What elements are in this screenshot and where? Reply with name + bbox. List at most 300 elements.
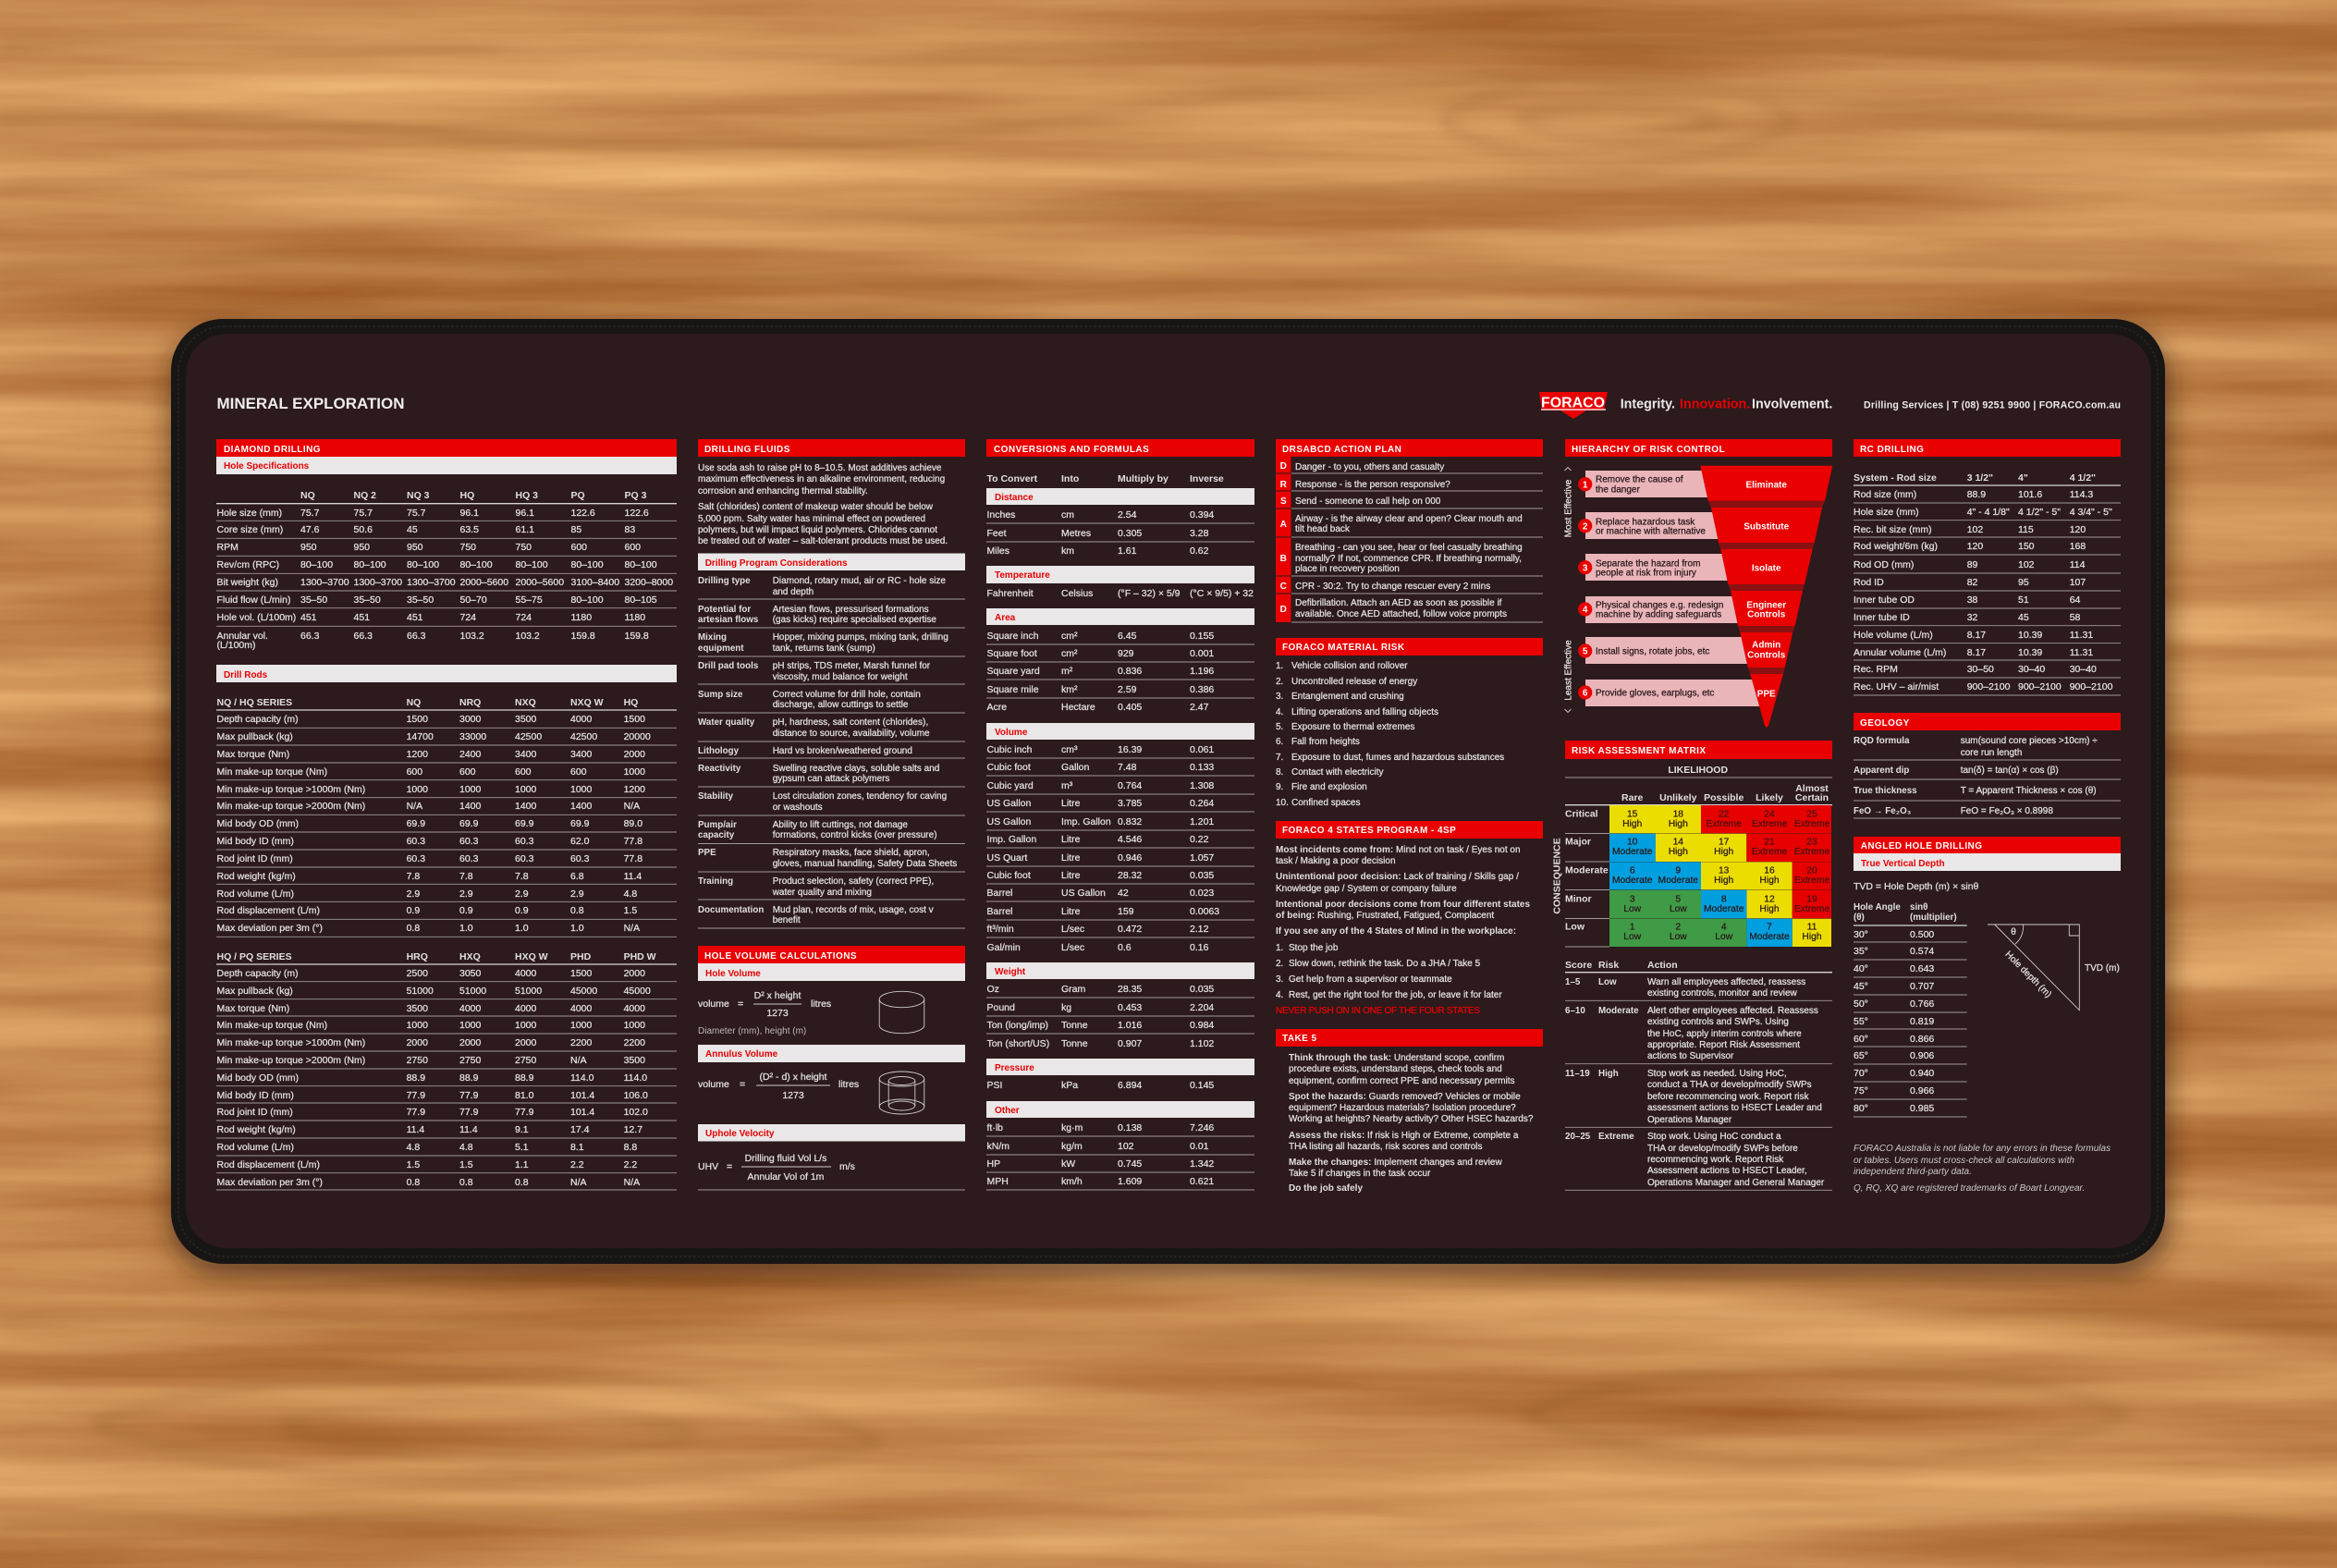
table: hole angle multipliers: 0.985 [1910,1103,1934,1114]
text block: 4SP explanation: Knowledge gap / System or company failure [1276,884,1457,894]
table: RC drilling specs: 114 [2070,559,2086,570]
heading: conversions and formulas: CONVERSIONS AND FORMULAS [994,445,1149,455]
table: area: 0.155 [1190,631,1214,642]
table: other: kg/m [1061,1141,1083,1152]
table: pressure: 0.145 [1190,1080,1214,1091]
table: NQ / HQ series: 7.8 [515,871,529,882]
table: hole specifications: 45 [407,524,418,535]
table: NQ / HQ series: 69.9 [570,818,590,829]
table: volume: 42 [1118,888,1129,899]
table: hole specifications: 50–70 [460,594,487,606]
subheading: drilling program considerations [698,553,965,570]
table: HQ / PQ series: 17.4 [570,1124,590,1135]
table: drilling program considerations: or washouts [773,802,823,813]
table: hole specifications: Rev/cm (RPC) [216,559,279,570]
text block: take 5 steps: Do the job safely [1289,1183,1363,1194]
table: area: 0.836 [1118,666,1142,677]
table: other: 102 [1118,1141,1134,1152]
mouse mat [171,319,2165,1264]
table: risk actions: Low [1598,977,1617,987]
table: risk actions: assessment actions to HSECT Leader and [1647,1103,1822,1113]
table: hole angle multipliers: 0.866 [1910,1034,1934,1045]
table: HQ / PQ series: 3500 [624,1055,645,1066]
text block: chlorides: be treated out of water – salt-tolerant products must be used. [698,536,948,546]
table: drilling program considerations: Ability to lift cuttings, not damage [773,820,908,830]
heading: drilling fluids [698,439,965,457]
table: HQ / PQ series: 77.9 [459,1090,479,1101]
table: hole specifications: 2000–5600 [516,577,564,588]
table: hole specifications: 96.1 [460,508,479,519]
table: NQ / HQ series: 60.3 [459,853,479,864]
table: volume: 2.12 [1190,924,1209,935]
control bars [1585,471,1761,706]
table: NQ / HQ series: 600 [407,766,422,778]
table: hole specifications: 80–100 [625,559,657,570]
table: area: 1.196 [1190,666,1214,677]
text block: take 5 steps: equipment, confirm correct PPE and necessary permits [1289,1076,1515,1086]
table: NQ / HQ series: 2400 [459,749,482,760]
table: volume: Litre [1061,834,1081,845]
table: hole specifications: 3100–8400 [571,577,619,588]
table: NQ / HQ series: 1.0 [570,923,584,934]
panel: geology [1854,713,2121,818]
table: HQ / PQ series: 0.8 [459,1177,473,1188]
heading: take 5: TAKE 5 [1282,1034,1317,1044]
list: material risks: 10. [1276,798,1289,808]
table: other [986,1122,1254,1190]
table: hole specifications: 75.7 [407,508,426,519]
table: HQ / PQ series: HXQ [459,951,481,962]
table: hole specifications: 35–50 [353,594,381,606]
table: weight: Oz [987,984,999,995]
table: area: 929 [1118,648,1134,659]
text block: 4SP explanation [1276,845,1530,937]
consequence row labels: Moderate [1565,865,1609,876]
table: volume: 0.264 [1190,798,1214,809]
table: hole specifications: 80–100 [407,559,439,570]
table: NQ / HQ series: 3000 [459,714,482,725]
table: NQ / HQ series: Rod joint ID (mm) [216,853,293,864]
table: HQ / PQ series: 2000 [624,968,645,979]
table: HQ / PQ series: Mid body ID (mm) [216,1090,294,1101]
number badges: 5 [1583,647,1588,657]
table: NQ / HQ series: 1400 [515,801,537,812]
table: area [986,631,1254,713]
text block: take 5 steps [1289,1053,1534,1194]
table: volume: m³ [1061,780,1073,791]
formula: annulus volume: (D² - d) x height [760,1072,827,1083]
number badges: 3 [1583,563,1588,573]
table: HQ / PQ series: 4.8 [407,1142,420,1153]
table: hole specifications: 1300–3700 [407,577,456,588]
table: hole specifications: 50.6 [353,524,373,535]
table: HQ / PQ series: 4000 [459,1003,482,1014]
risk matrix cells: 16 [1764,866,1775,876]
table: HQ / PQ series: 51000 [515,986,542,997]
table: RC drilling specs: 30–40 [2070,664,2097,675]
table: NQ / HQ series: 60.3 [459,836,479,847]
risk matrix cells: 12 [1764,895,1775,905]
table: hole specifications: 66.3 [353,631,373,642]
table: drilling program considerations: Water quality [698,717,755,728]
formula: annulus volume: volume [698,1079,729,1090]
risk matrix cells: 5 [1675,895,1681,905]
table: distance: 3.28 [1190,528,1209,539]
table: hole angle multipliers: 0.819 [1910,1016,1934,1027]
text block: take 5 steps: Assess the risks: If risk is High or Extreme, complete a [1289,1131,1519,1141]
table: risk actions: THA or develop/modify SWPs before [1647,1144,1798,1154]
table: NQ / HQ series: Mid body OD (mm) [216,818,299,829]
table: HQ / PQ series: 1.5 [407,1159,420,1170]
table: risk actions: the HoC, apply interim controls where [1647,1029,1802,1039]
table: HQ / PQ series: Mid body OD (mm) [216,1072,299,1084]
risk matrix cells: Low [1623,904,1642,914]
table: HQ / PQ series: Rod weight (kg/m) [216,1124,296,1135]
table: RC drilling specs: Inner tube ID [1854,612,1910,623]
table: drilling program considerations: Mud plan, records of mix, usage, cost v [773,905,934,915]
text block: take 5 steps: Take 5 if changes in the task occur [1289,1169,1431,1179]
table: drilling program considerations: Documentation [698,905,764,915]
table: NQ / HQ series: 33000 [459,731,486,742]
heading: risk assessment matrix [1565,741,1832,759]
effectiveness axis [1564,468,1573,712]
table: pressure: PSI [987,1080,1002,1091]
subheading: annulus volume: Annulus Volume [705,1049,778,1060]
table: NQ / HQ series: 6.8 [570,871,584,882]
table: risk actions: recommencing work. Report Risk [1647,1155,1784,1165]
table: volume: Litre [1061,798,1081,809]
text block: soda ash [698,463,945,496]
table: hole specifications: 3200–8000 [625,577,673,588]
risk matrix cells: High [1714,847,1734,857]
control descriptions: Physical changes e.g. redesign [1596,601,1723,611]
table: volume: Imp. Gallon [1061,816,1111,827]
list: material risks: 8. [1276,767,1283,778]
table: NQ / HQ series: 3500 [515,714,537,725]
table: distance: Metres [1061,528,1091,539]
table: HQ / PQ series: Rod joint ID (mm) [216,1107,293,1118]
table: hole specifications: 724 [460,612,476,623]
disclaimer: Q, RQ, XQ are registered trademarks of Boart Longyear. [1854,1183,2085,1194]
table: hole angle multipliers: 80° [1854,1103,1868,1114]
table: HQ / PQ series: 2000 [515,1037,537,1048]
subheading: hole specifications [216,457,677,474]
table: drilling program considerations: Reactivity [698,764,741,774]
table: hole specifications: NQ 2 [353,490,376,501]
table: temperature: (°F – 32) × 5/9 [1118,588,1181,599]
table: other: 0.138 [1118,1122,1142,1133]
mat drop shadow [169,327,2171,1276]
table: hole specifications: 451 [353,612,370,623]
table: hole angle multipliers: Hole Angle [1854,902,1901,913]
table: RC drilling specs: 102 [1967,524,1983,535]
consequence row labels: Major [1565,837,1591,848]
table: RC drilling specs: 89 [1967,559,1978,570]
list: 4SP actions: Stop the job [1289,943,1339,953]
table: area: Acre [987,702,1007,713]
formula: hole volume: 1273 [766,1008,789,1019]
table: volume: 0.023 [1190,888,1214,899]
table: hole specifications: HQ [460,490,474,501]
risk matrix cells: Low [1715,932,1733,942]
table: drilling program considerations: distance to source, availability, volume [773,729,930,739]
table: NQ / HQ series: 2.9 [459,888,473,900]
letter column: A [1280,520,1287,530]
heading: risk assessment matrix: RISK ASSESSMENT MATRIX [1572,746,1706,756]
formula: uphole velocity: m/s [839,1161,855,1172]
table: drilling program considerations: capacity [698,830,735,840]
table: risk actions: before recommencing work. Report risk [1647,1092,1810,1102]
formula: uphole velocity: = [727,1161,732,1172]
text block: chlorides [698,502,948,546]
table: volume: Cubic foot [987,762,1031,773]
table: HQ / PQ series: 0.8 [407,1177,420,1188]
table: NQ / HQ series: 2000 [624,749,645,760]
table: RC drilling specs: Rod weight/6m (kg) [1854,541,1938,552]
risk matrix cells: Low [1623,932,1642,942]
table: NQ / HQ series: Max pullback (kg) [216,731,293,742]
subheading: other: Other [995,1106,1020,1116]
table: RC drilling specs: 8.17 [1967,647,1986,658]
table: HQ / PQ series: 4000 [570,1003,593,1014]
table: HQ / PQ series: 45000 [624,986,651,997]
table: drilling program considerations: and depth [773,587,814,597]
table: NQ / HQ series: 77.8 [624,853,642,864]
table: distance [986,509,1254,557]
table: temperature: Fahrenheit [987,588,1034,599]
risk matrix cells: High [1802,932,1822,942]
risk matrix cells: 22 [1719,810,1730,820]
text block: chlorides: 5,000 ppm. Salty water has minimal effect on powdered [698,514,925,524]
table: geology formulas: FeO → Fe₂O₃ [1854,806,1911,816]
table: hole specifications: 1180 [625,612,645,623]
heading: 4 states program [1276,821,1543,839]
table: other: MPH [987,1176,1009,1187]
table: volume: 159 [1118,906,1134,917]
table: NQ / HQ series: Max torque (Nm) [216,749,289,760]
table: other: 1.609 [1118,1176,1142,1187]
table: hole specifications: 750 [516,542,532,553]
number badges: 1 [1583,480,1588,490]
table: NQ / HQ series: Min make-up torque >1000m (Nm) [216,784,365,795]
table: volume: ft³/min [987,924,1014,935]
text block: soda ash: Use soda ash to raise pH to 8–10.5. Most additives achieve [698,463,942,473]
table: hole specifications: Hole size (mm) [216,508,282,519]
table: RC drilling specs: 38 [1967,594,1978,606]
table: hole specifications: Hole vol. (L/100m) [216,612,296,623]
table: area: Square yard [987,666,1040,677]
table: HQ / PQ series: 77.9 [407,1107,425,1118]
table: HQ / PQ series: 11.4 [407,1124,424,1135]
diagram: TVD triangle [1988,925,2120,1011]
table: area: 0.001 [1190,648,1214,659]
table: hole specifications: 35–50 [300,594,327,606]
table: RC drilling specs: 8.17 [1967,630,1986,641]
inverted funnel: Controls [1747,651,1786,661]
risk matrix cells: Moderate [1749,932,1790,942]
contact line: Drilling Services | T (08) 9251 9900 | FORACO.com.au [1864,400,2121,411]
table: HQ / PQ series: Min make-up torque >1000m (Nm) [216,1037,365,1048]
table: weight: 28.35 [1118,984,1142,995]
tagline: Involvement. [1752,398,1832,412]
table header: conversions: Inverse [1190,473,1224,484]
table: NQ / HQ series: 1400 [459,801,482,812]
table: hole specifications: 63.5 [460,524,479,535]
table: weight: 0.453 [1118,1002,1142,1013]
disclaimer [1854,1144,2111,1194]
table: hole specifications: 55–75 [516,594,543,606]
text block: 4SP explanation: If you see any of the 4 States of Mind in the workplace: [1276,926,1516,937]
table: RC drilling specs: 4" - 4 1/8" [1967,507,2010,518]
table: hole specifications: 80–100 [300,559,333,570]
risk matrix cells: High [1669,847,1688,857]
panel: risk assessment matrix [1551,741,1832,1190]
table: HQ / PQ series: 8.1 [570,1142,584,1153]
table: HQ / PQ series: 1.1 [515,1159,529,1170]
control descriptions: the danger [1596,485,1640,496]
table header: conversions: Into [1061,473,1079,484]
table: risk actions: Action [1647,960,1678,971]
table: drilling program considerations: Swelling reactive clays, soluble salts and [773,764,939,774]
table: hole angle multipliers: 40° [1854,963,1868,974]
subheading: area: Area [995,613,1016,623]
table: NQ / HQ series: 69.9 [515,818,534,829]
letter column: B [1280,554,1287,564]
table: volume: Cubic yard [987,780,1034,791]
table: hole angle multipliers: 0.574 [1910,946,1934,957]
table: hole specifications: 451 [407,612,423,623]
heading: material risk [1276,638,1543,655]
text block: 4SP explanation: Most incidents come from: Mind not on task / Eyes not on [1276,845,1521,855]
heading: geology [1854,713,2121,730]
subheading: hole specifications: Hole Specifications [224,461,310,472]
table: NQ / HQ series: 7.8 [459,871,473,882]
table: other: ft·lb [987,1122,1003,1133]
inverted funnel: Admin [1752,641,1780,651]
table: hole angle multipliers: 35° [1854,946,1868,957]
table: temperature: Celsius [1061,588,1093,599]
table: NQ / HQ series: 3400 [570,749,593,760]
heading: DRSABCD action plan: DRSABCD ACTION PLAN [1282,445,1401,455]
disclaimer: FORACO Australia is not liable for any errors in these formulas [1854,1144,2111,1154]
subheading: weight [986,962,1254,979]
table: risk actions: Risk [1598,960,1619,971]
table: NQ / HQ series: 0.8 [570,905,584,916]
text block: soda ash: corrosion and enhancing thermal stability. [698,486,868,496]
table: drilling program considerations: pH strips, TDS meter, Marsh funnel for [773,661,931,671]
heading: geology: GEOLOGY [1860,718,1910,729]
panel: take 5 [1276,1029,1543,1194]
table: volume: cm³ [1061,744,1078,755]
table: volume: 0.6 [1118,942,1132,953]
formula: uphole velocity: Annular Vol of 1m [748,1171,825,1182]
likelihood column headers: Possible [1704,792,1744,803]
list: material risks [1276,661,1504,808]
table: HQ / PQ series: 51000 [459,986,486,997]
subheading: annulus volume [698,1045,965,1062]
table: volume: 0.764 [1118,780,1142,791]
table: distance: 2.54 [1118,509,1137,521]
table: hole specifications: 103.2 [516,631,540,642]
table: RC drilling specs: 11.31 [2070,647,2093,658]
subheading: volume: Volume [995,728,1028,738]
letter column: R [1280,480,1288,490]
action plan steps: place in recovery position [1295,564,1400,574]
letter column [1276,457,1291,622]
letter column: D [1280,605,1287,615]
table: drilling program considerations: water quality and mixing [772,888,872,898]
table: risk actions: appropriate. Report Risk Assessment [1647,1040,1800,1050]
table: drilling program considerations: PPE [698,848,716,858]
action plan steps: Defibrillation. Attach an AED as soon as possible if [1295,598,1502,608]
table: drilling program considerations: gloves, manual handling, Safety Data Sheets [773,859,957,869]
list: material risks: Exposure to thermal extremes [1291,722,1414,732]
table: weight: 0.035 [1190,984,1214,995]
table: volume: Gal/min [987,942,1021,953]
table: drilling program considerations: Training [698,876,733,887]
table: NQ / HQ series: 4000 [570,714,593,725]
subheading: temperature: Temperature [995,570,1050,581]
table: area: cm² [1061,631,1078,642]
table: HQ / PQ series: 3500 [407,1003,428,1014]
table: hole angle multipliers: 65° [1854,1050,1868,1061]
list: material risks: Uncontrolled release of energy [1291,677,1417,687]
text block: 4SP explanation: of being: Rushing, Frustrated, Fatigued, Complacent [1276,911,1494,921]
list: material risks: Confined spaces [1291,798,1361,808]
table: HQ / PQ series: 3050 [459,968,482,979]
table: NQ / HQ series: 600 [459,766,476,778]
table: HQ / PQ series: Max deviation per 3m (°) [216,1177,323,1188]
table: hole specifications: 80–100 [516,559,548,570]
table: HQ / PQ series: Rod displacement (L/m) [216,1159,320,1170]
table: area: Square foot [987,648,1037,659]
heading: RC drilling [1854,439,2121,457]
table: RC drilling specs: 10.39 [2018,630,2042,641]
table: RC drilling specs: 107 [2070,577,2086,588]
table: hole specifications: PQ [571,490,585,501]
table: RC drilling specs: Rod size (mm) [1854,489,1916,500]
table: hole specifications: 80–100 [353,559,386,570]
table: HQ / PQ series: Min make-up torque >2000m (Nm) [216,1055,365,1066]
table: geology formulas: RQD formula [1854,736,1910,746]
table: risk actions: 6–10 [1565,1006,1585,1016]
table: hole angle multipliers: 0.966 [1910,1085,1934,1096]
table: hole specifications: 80–105 [625,594,657,606]
action plan steps: Airway - is the airway clear and open? Clear mouth and [1295,514,1523,524]
table: RC drilling specs: Rec. bit size (mm) [1854,524,1932,535]
table: risk actions: High [1598,1069,1619,1079]
table: HQ / PQ series: 1.5 [459,1159,473,1170]
table: area: km² [1061,684,1078,695]
table: area: Square mile [987,684,1039,695]
logo: FORACO [1539,392,1608,419]
risk matrix cells: 24 [1764,810,1775,820]
table: weight: 1.102 [1190,1038,1214,1049]
tagline: Innovation. [1680,398,1750,412]
diagram: TVD triangle: θ [2011,927,2016,937]
table: distance: cm [1061,509,1074,521]
control descriptions: Provide gloves, earplugs, etc [1596,689,1714,699]
consequence row labels: Critical [1565,809,1598,820]
table: HQ / PQ series: 45000 [570,986,597,997]
table: hole specifications: 1300–3700 [300,577,349,588]
table: RC drilling specs: Rod OD (mm) [1854,559,1914,570]
risk matrix cells: Moderate [1612,876,1653,886]
table: drilling program considerations: Product selection, safety (correct PPE), [773,876,934,887]
table: HQ / PQ series: 77.9 [459,1107,479,1118]
table: distance: 0.305 [1118,528,1142,539]
heading: RC drilling: RC DRILLING [1860,445,1924,455]
